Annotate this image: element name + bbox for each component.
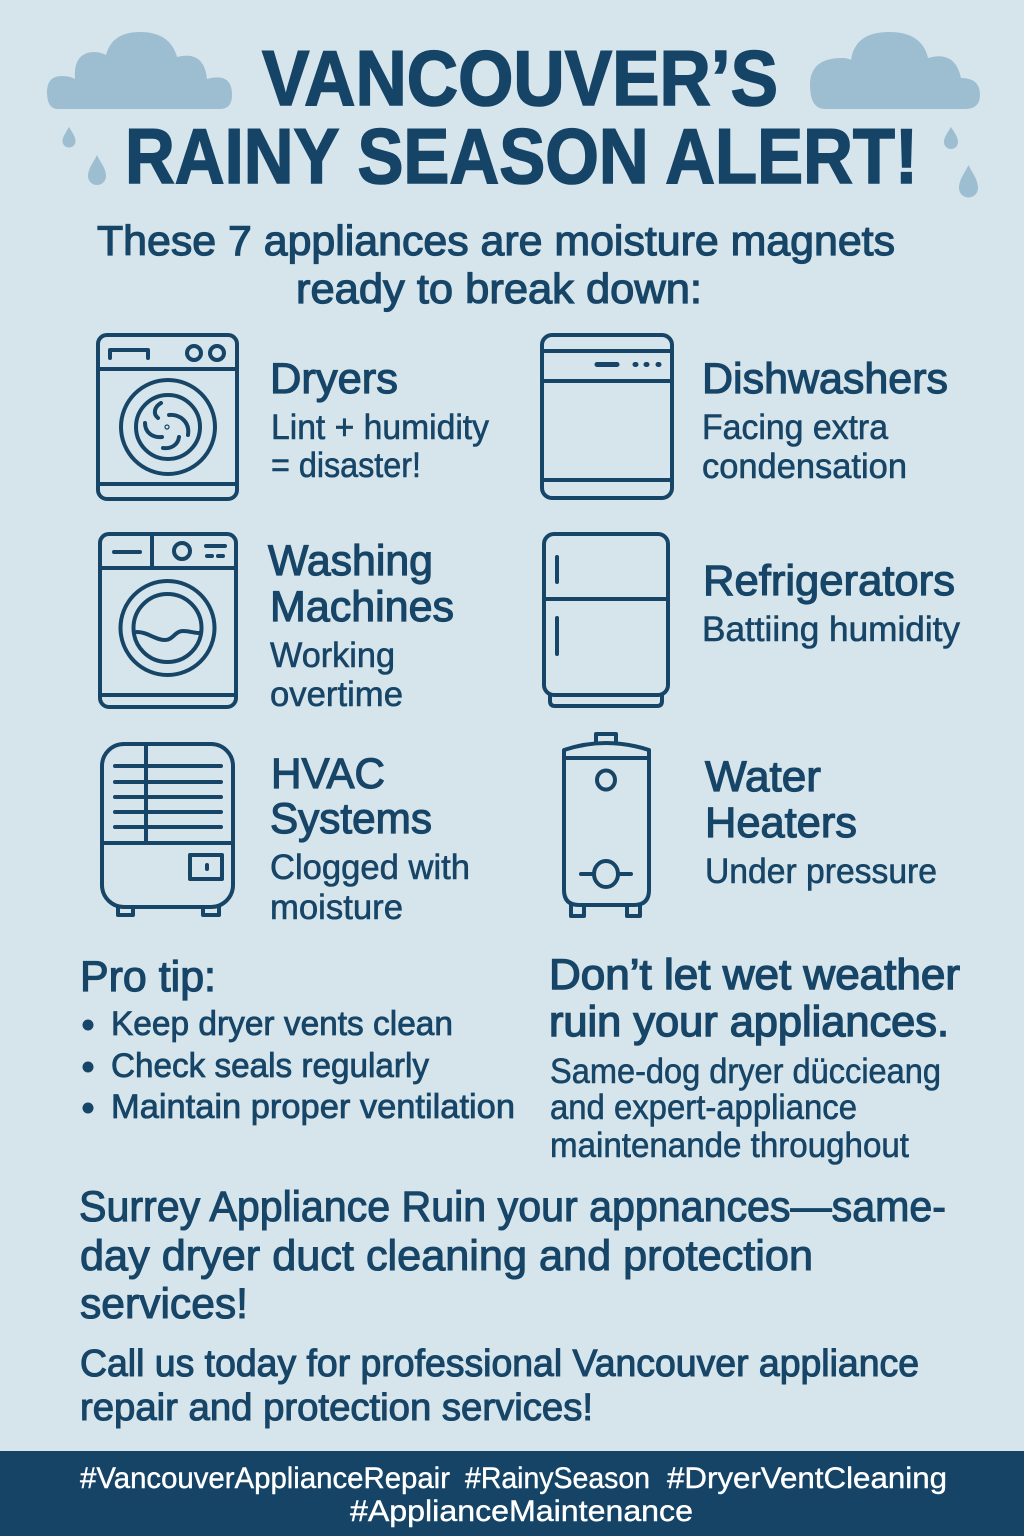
water heaters text: Under pressure <box>705 852 937 891</box>
title: VANCOUVER’S <box>262 34 778 122</box>
icon: dryer <box>98 335 237 499</box>
call to action <box>80 1343 919 1429</box>
panel: dishwashers <box>542 335 948 498</box>
footer hashtag bar: #VancouverApplianceRepair <box>80 1462 450 1495</box>
panel: hvac systems <box>102 744 470 927</box>
washing machines text: Washing <box>268 537 433 585</box>
icon: left rain cloud <box>47 32 232 109</box>
wet weather text <box>550 1052 941 1165</box>
panel: pro tip <box>80 953 515 1126</box>
panel: washing machines <box>100 534 454 714</box>
water heaters text <box>705 753 937 891</box>
subheading: These 7 appliances are moisture magnets <box>97 217 895 264</box>
wet weather text: Same-dog dryer düccieang <box>550 1052 941 1091</box>
subheading: ready to break down: <box>296 265 702 312</box>
pro tip list: Maintain proper ventilation <box>111 1088 515 1126</box>
footer hashtag bar: #RainySeason <box>465 1462 650 1495</box>
call to action: Call us today for professional Vancouver appliance <box>80 1343 919 1385</box>
service message: services! <box>80 1280 248 1328</box>
icon: left rain drops <box>62 127 106 185</box>
water heaters text: Heaters <box>705 799 857 847</box>
refrigerators text: Battiing humidity <box>702 610 960 649</box>
wet weather heading <box>549 951 960 1046</box>
dishwashers text <box>702 355 948 486</box>
footer hashtag bar: #ApplianceMaintenance <box>350 1495 693 1528</box>
wet weather heading: Don’t let wet weather <box>549 951 960 999</box>
subheading <box>97 217 895 312</box>
panel: water heaters <box>564 734 937 916</box>
dishwashers text: Facing extra <box>702 408 889 447</box>
wet weather text: and expert-appliance <box>550 1088 857 1127</box>
icon: washing machine <box>100 534 236 707</box>
footer hashtag bar: #DryerVentCleaning <box>667 1462 947 1495</box>
icon: right rain drops <box>944 127 978 198</box>
pro tip list: Keep dryer vents clean <box>111 1005 453 1043</box>
service message: day dryer duct cleaning and protection <box>80 1232 813 1280</box>
title <box>125 34 918 200</box>
pro tip heading: Pro tip: <box>80 953 216 1001</box>
refrigerators text: Refrigerators <box>703 557 955 605</box>
panel: wet weather message <box>549 951 960 1165</box>
washing machines text <box>268 537 454 714</box>
icon: water heater <box>564 734 649 916</box>
wet weather text: maintenande throughout <box>550 1126 909 1165</box>
pro tip list: Check seals regularly <box>111 1047 429 1085</box>
service message: Surrey Appliance Ruin your appnances—same- <box>79 1183 946 1231</box>
footer hashtag bar <box>0 1451 1024 1536</box>
title: RAINY SEASON ALERT! <box>125 112 918 200</box>
icon: dishwasher <box>542 335 672 498</box>
washing machines text: Machines <box>270 583 454 631</box>
washing machines text: Working <box>270 636 395 675</box>
dryers text: Dryers <box>270 355 398 403</box>
dishwashers text: Dishwashers <box>702 355 948 403</box>
panel: dryers <box>98 335 489 499</box>
water heaters text: Water <box>705 753 821 801</box>
icon: refrigerator <box>544 534 668 706</box>
refrigerators text <box>702 557 960 649</box>
hvac text <box>270 750 470 927</box>
hvac text: moisture <box>270 888 403 927</box>
hvac text: HVAC <box>271 750 385 798</box>
dishwashers text: condensation <box>702 447 907 486</box>
icon: right rain cloud <box>810 32 980 109</box>
hvac text: Clogged with <box>270 848 470 887</box>
dryers text: Lint + humidity <box>271 408 489 447</box>
washing machines text: overtime <box>270 675 403 714</box>
dryers text <box>270 355 489 485</box>
wet weather heading: ruin your appliances. <box>549 998 949 1046</box>
icon: hvac unit <box>102 744 233 915</box>
panel: refrigerators <box>544 534 960 706</box>
service message <box>79 1183 946 1328</box>
dryers text: = disaster! <box>271 446 421 485</box>
hvac text: Systems <box>270 795 432 843</box>
pro tip list <box>82 1005 515 1126</box>
call to action: repair and protection services! <box>80 1387 593 1429</box>
